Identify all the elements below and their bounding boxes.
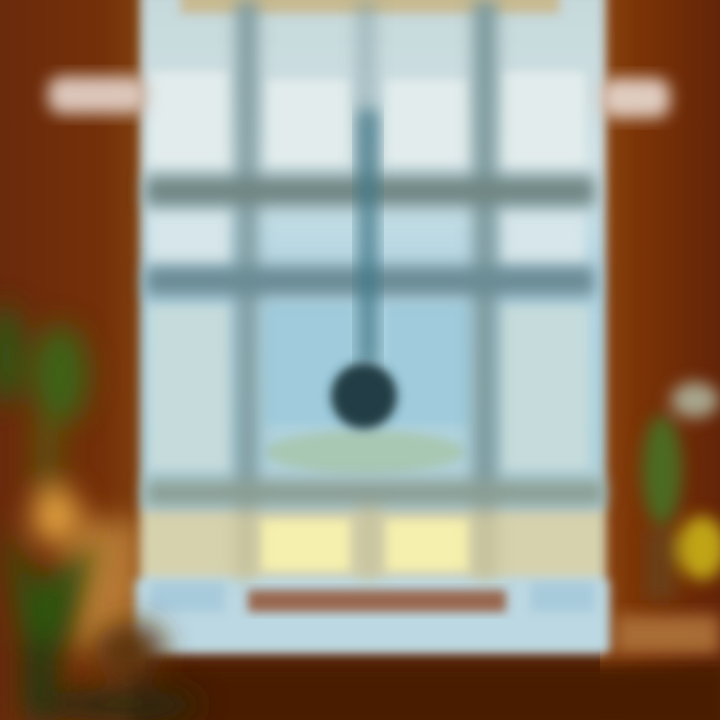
lower cream band xyxy=(140,510,605,576)
row two panes xyxy=(150,210,585,265)
bottom blue band xyxy=(135,580,610,652)
bright yellow panes xyxy=(260,520,470,570)
brown pot shadow xyxy=(95,622,165,678)
vertical bars xyxy=(236,0,258,510)
right plant xyxy=(642,382,720,600)
warm lower wall glow left xyxy=(70,520,140,650)
left plant xyxy=(0,305,200,720)
leaves xyxy=(642,415,682,525)
upper leaves xyxy=(32,325,88,425)
right wood wall xyxy=(600,0,720,720)
pendulum disc xyxy=(331,363,397,429)
window xyxy=(135,0,610,655)
window sill right xyxy=(615,615,720,655)
right white curtain rod xyxy=(600,78,670,118)
pendulum stem xyxy=(358,110,378,365)
yellow flower xyxy=(678,516,720,580)
left white curtain rod xyxy=(48,76,148,114)
bottom dark ledge xyxy=(130,664,720,720)
red sill bar xyxy=(248,590,506,612)
middle blue panes xyxy=(265,305,470,425)
bottom bright patches xyxy=(150,582,595,612)
top tan band xyxy=(180,0,560,14)
orange flower xyxy=(32,488,80,544)
side panes xyxy=(150,305,588,470)
stem pot xyxy=(645,530,675,600)
lower leaves xyxy=(5,520,95,690)
upper bright panes xyxy=(150,72,585,167)
left wood wall xyxy=(0,0,145,720)
landscape hint xyxy=(265,430,465,474)
horizontal bars xyxy=(145,176,595,206)
window glass xyxy=(140,0,606,655)
window grid xyxy=(145,0,605,580)
